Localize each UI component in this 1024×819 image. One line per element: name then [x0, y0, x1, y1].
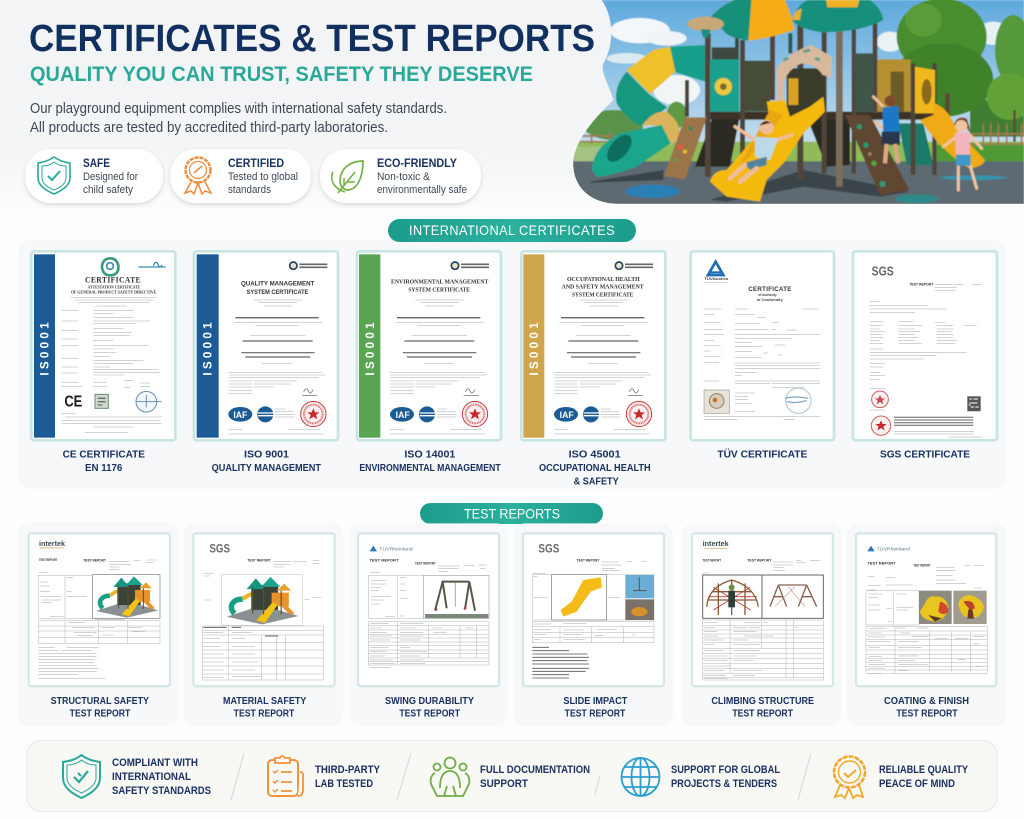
certificate: CE: ATTESTATION CERTIFICATE — [88, 284, 141, 289]
certificate: ISO 9001 — [194, 251, 338, 474]
certificate: SGS: SGS CERTIFICATE — [880, 450, 970, 461]
test report card: material safety — [183, 523, 343, 726]
badge: safe: child safety — [83, 184, 133, 196]
benefit: lab tested: THIRD-PARTY — [315, 764, 381, 776]
benefit: global support — [622, 758, 780, 796]
test report card: climbing structure: TEST REPORT — [732, 709, 794, 720]
benefit: reliable quality: PEACE OF MIND — [879, 778, 955, 790]
benefit: documentation: FULL DOCUMENTATION — [480, 764, 590, 776]
badge: safe: SAFE — [83, 156, 110, 170]
certificate: TUV — [691, 251, 834, 461]
benefit: global support: PROJECTS & TENDERS — [671, 778, 777, 790]
benefit: compliant: SAFETY STANDARDS — [112, 785, 211, 797]
benefit: lab tested: LAB TESTED — [315, 778, 373, 790]
test report card: structural safety: TEST REPORT — [70, 709, 131, 720]
benefit: global support: SUPPORT FOR GLOBAL — [671, 764, 780, 776]
section heading: test reports — [420, 503, 603, 524]
test report card: coating and finish: TEST REPORT — [913, 564, 931, 568]
badge: eco-friendly: Non-toxic & — [377, 171, 431, 183]
test report card: swing durability: TEST REPORT — [399, 709, 461, 720]
subtitle: QUALITY YOU CAN TRUST, SAFETY THEY DESERVE — [30, 63, 533, 86]
test report card: climbing structure — [682, 523, 842, 726]
badge: eco-friendly: ECO-FRIENDLY — [377, 156, 457, 170]
panel: international certificates background — [18, 240, 1007, 489]
test report card: swing durability: TEST REPORT — [415, 561, 436, 565]
photo: children on a playground — [570, 0, 1024, 204]
certificate: SGS: TEST REPORT — [909, 283, 934, 287]
certificate: ISO 14001: ENVIRONMENTAL MANAGEMENT — [391, 279, 488, 285]
certificate: CE: EN 1176 — [85, 463, 123, 474]
certificate: ISO 9001: QUALITY MANAGEMENT — [241, 282, 315, 288]
certificate: ISO 9001: IAF — [233, 410, 248, 420]
benefit: reliable quality: RELIABLE QUALITY — [879, 764, 969, 776]
badge: certified: CERTIFIED — [228, 156, 284, 170]
certificate: TUV: TÜVAustria — [704, 276, 729, 281]
certificate: SGS: SGS — [872, 264, 894, 279]
certificate: ISO 14001: SYSTEM CERTIFICATE — [408, 288, 470, 294]
benefit: lab tested — [268, 756, 381, 796]
benefit: compliant — [63, 755, 211, 798]
test report card: coating and finish — [847, 523, 1007, 726]
certificate: CE: CERTIFICATE — [85, 276, 141, 285]
test report card: material safety: TEST REPORT — [247, 558, 271, 562]
certificate: ISO 45001 — [521, 251, 665, 487]
certificate: CE: IS0001 — [39, 322, 52, 376]
certificate: ISO 45001: OCCUPATIONAL HEALTH — [567, 277, 640, 283]
certificate: ISO 45001: AND SAFETY MANAGEMENT — [562, 284, 644, 290]
certificate: CE: CE — [64, 393, 82, 410]
intro paragraph: All products are tested by accredited third-party laboratories. — [30, 120, 388, 136]
title: CERTIFICATES & TEST REPORTS — [29, 18, 595, 60]
certificate: ISO 14001: IS0001 — [364, 322, 377, 376]
test report card: coating and finish: TEST REPORT — [867, 562, 896, 566]
test report card: climbing structure: CLIMBING STRUCTURE — [711, 696, 814, 707]
badge: certified — [170, 149, 311, 203]
section heading: international certificates: INTERNATIONAL CERTIFICATES — [409, 222, 615, 238]
test report card: slide impact — [513, 523, 673, 726]
section heading: international certificates — [388, 219, 636, 242]
certificate: CE — [31, 251, 175, 474]
test report card: material safety: TEST REPORT — [234, 709, 295, 720]
certificate: ISO 45001: IAF — [560, 410, 574, 420]
badge: eco-friendly — [320, 149, 481, 203]
certificate: ISO 9001: QUALITY MANAGEMENT — [212, 463, 322, 474]
intro paragraph — [30, 101, 447, 136]
test report card: material safety: MATERIAL SAFETY — [223, 696, 306, 707]
certificate: ISO 14001: ENVIRONMENTAL MANAGEMENT — [359, 463, 501, 474]
badge: safe — [25, 149, 163, 203]
benefit: reliable quality — [834, 756, 969, 798]
certificate: ISO 14001: IAF — [396, 410, 410, 420]
certificate: ISO 45001: ISO 45001 — [569, 450, 621, 461]
test report card: structural safety: STRUCTURAL SAFETY — [51, 696, 149, 707]
certificate: ISO 45001: & SAFETY — [574, 476, 619, 487]
test report card: structural safety: TEST REPORT — [39, 558, 57, 562]
certificate: ISO 45001: IS0001 — [528, 322, 541, 376]
test report card: swing durability: TÜVRheinland — [379, 545, 413, 551]
certificate: TUV: of Authority — [758, 293, 777, 297]
test report card: coating and finish: TÜVRheinland — [877, 545, 910, 551]
benefit: compliant: INTERNATIONAL — [112, 771, 191, 783]
test report card: swing durability — [349, 523, 509, 726]
test report card: slide impact: SLIDE IMPACT — [563, 696, 628, 707]
section heading: test reports: TEST REPORTS — [464, 506, 560, 522]
test report card: slide impact: TEST REPORT — [577, 558, 600, 562]
intro paragraph: Our playground equipment complies with international safety standards. — [30, 101, 447, 117]
badge: eco-friendly: environmentally safe — [377, 184, 467, 196]
bottom benefits bar — [27, 740, 997, 812]
test report card: structural safety: intertek — [39, 541, 65, 548]
certificate: TUV: of Conformity — [757, 298, 784, 302]
certificate: ISO 45001: OCCUPATIONAL HEALTH — [539, 463, 651, 474]
benefit: compliant: COMPLIANT WITH — [112, 757, 198, 769]
certificate: TUV: TÜV CERTIFICATE — [717, 448, 807, 461]
test report card: climbing structure: intertek — [703, 541, 729, 548]
certificate: ISO 9001: IS0001 — [202, 322, 215, 376]
benefit: documentation — [431, 758, 590, 796]
header background — [0, 0, 1024, 212]
certificate: SGS — [853, 251, 997, 461]
test report card: swing durability: TEST REPORT — [369, 558, 399, 562]
test report card: structural safety: TEST REPORT — [83, 558, 107, 562]
badge: safe: Designed for — [83, 171, 138, 183]
certificate: ISO 14001 — [357, 251, 501, 474]
test report card: climbing structure: TEST REPORT — [747, 558, 772, 562]
test report card: swing durability: SWING DURABILITY — [385, 696, 474, 707]
test report card: coating and finish: COATING & FINISH — [884, 696, 969, 707]
test report card: slide impact: TEST REPORT — [565, 709, 626, 720]
certificate: CE: CE CERTIFICATE — [63, 450, 145, 461]
certificate: CE: OF GENERAL PRODUCT SAFETY DIRECTIVE — [71, 289, 157, 294]
test report card: slide impact: SGS — [538, 541, 559, 555]
benefit: documentation: SUPPORT — [480, 778, 528, 790]
certificate: ISO 14001: ISO 14001 — [404, 450, 456, 461]
test report card: coating and finish: TEST REPORT — [896, 709, 958, 720]
certificate: ISO 45001: SYSTEM CERTIFICATE — [572, 292, 633, 298]
certificate: ISO 9001: ISO 9001 — [244, 450, 289, 461]
test report card: structural safety — [18, 523, 179, 726]
certificate: ISO 9001: SYSTEM CERTIFICATE — [247, 290, 308, 296]
test report card: material safety: SGS — [209, 541, 230, 555]
badge: certified: Tested to global — [228, 171, 298, 183]
certificate: TUV: CERTIFICATE — [748, 286, 792, 293]
badge: certified: standards — [228, 184, 271, 196]
test report card: climbing structure: TEST REPORT — [703, 558, 721, 562]
